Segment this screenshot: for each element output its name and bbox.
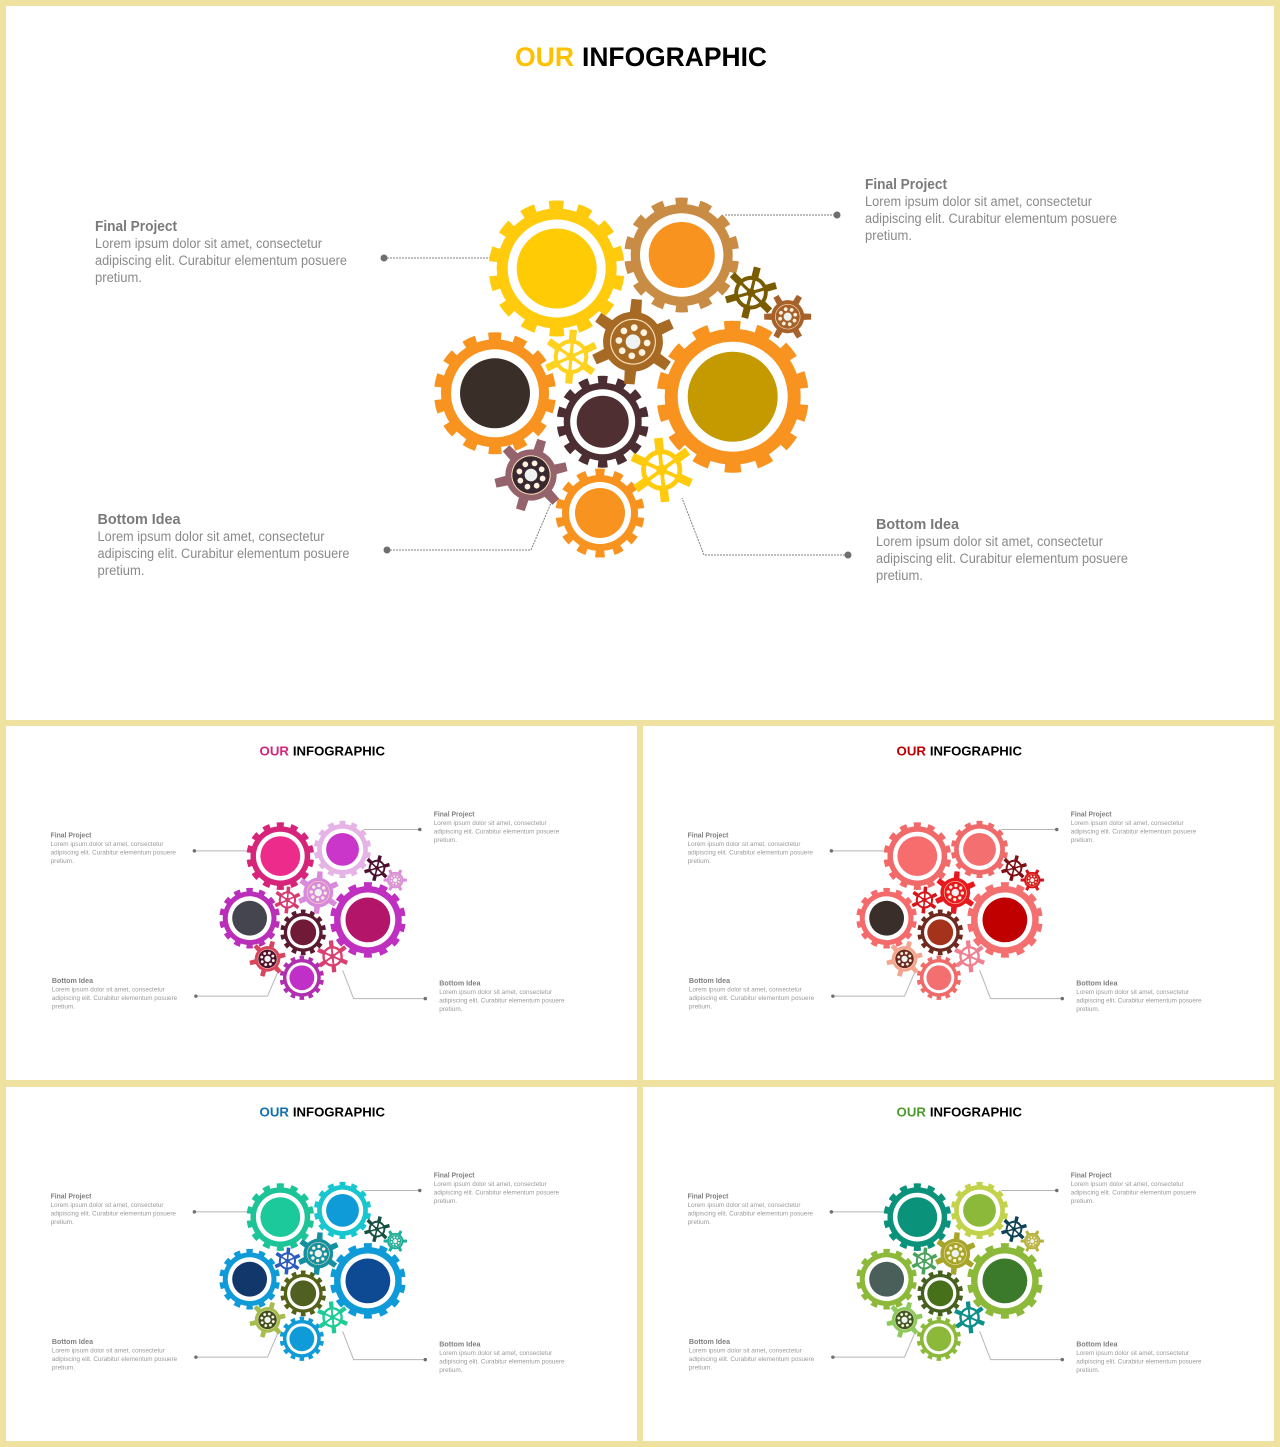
text block: bottom right: pretium. (1076, 1367, 1100, 1374)
text block: top left (51, 830, 176, 865)
text block: bottom left: pretium. (689, 1004, 712, 1011)
text block: bottom right: adipiscing elit. Curabitur elementum posuere (1076, 1359, 1202, 1366)
text block: top left: pretium. (95, 270, 142, 285)
leader: bottom right (682, 498, 852, 558)
leader: top left (830, 849, 884, 853)
text block: bottom left: Bottom Idea (52, 976, 94, 985)
gear: bearing teal (296, 1231, 340, 1276)
text block: bottom left: Lorem ipsum dolor sit amet, consectetur (52, 1348, 165, 1355)
text block: bottom right: Bottom Idea (439, 1340, 481, 1349)
text block: top right: pretium. (434, 837, 457, 844)
title: INFOGRAPHIC (582, 42, 767, 72)
text block: bottom left: adipiscing elit. Curabitur elementum posuere (52, 995, 177, 1002)
text block: bottom left: Lorem ipsum dolor sit amet, consectetur (98, 529, 325, 544)
gear: large purple and crimson (333, 885, 403, 955)
text block: top left: adipiscing elit. Curabitur elementum posuere (688, 849, 813, 856)
text block: top right: adipiscing elit. Curabitur elementum posuere (434, 828, 559, 835)
panel: green slide (643, 1087, 1274, 1441)
leader: bottom left (384, 503, 551, 554)
text block: bottom left: Lorem ipsum dolor sit amet, consectetur (689, 1348, 802, 1355)
gear: blue and navy (221, 1251, 278, 1307)
gear: dark centre (282, 911, 324, 953)
gear: bearing lime (246, 1297, 289, 1342)
text block: top left: adipiscing elit. Curabitur elementum posuere (51, 849, 176, 856)
text block: bottom right: Lorem ipsum dolor sit amet, consectetur (876, 534, 1103, 549)
leader: bottom left (194, 973, 277, 998)
text block: bottom left: adipiscing elit. Curabitur elementum posuere (52, 1356, 177, 1363)
text block: bottom right (1076, 979, 1202, 1013)
gear: orange and dark (438, 337, 552, 450)
text block: bottom left: Bottom Idea (689, 1337, 731, 1346)
gear: bearing light green (883, 1297, 926, 1342)
gear: bearing small (757, 285, 819, 348)
text block: bottom left: Bottom Idea (98, 512, 181, 528)
text block: bottom right: Lorem ipsum dolor sit amet, consectetur (1076, 1350, 1190, 1357)
text block: top right: Final Project (1071, 810, 1112, 819)
panel: blue slide (6, 1087, 637, 1441)
text block: bottom right: Bottom Idea (1076, 979, 1118, 988)
title: OUR (897, 743, 926, 758)
gear: bearing olive (933, 1231, 977, 1276)
text block: bottom left (689, 1337, 814, 1372)
gear: purple and slate (221, 890, 278, 946)
text block: top right (865, 177, 1117, 243)
text block: top left (95, 219, 347, 285)
gear: bearing small (1017, 1225, 1048, 1257)
text block: top right: adipiscing elit. Curabitur elementum posuere (1071, 828, 1196, 835)
text block: bottom right: pretium. (439, 1006, 463, 1013)
gear: blue bottom (282, 1319, 322, 1359)
gear: dark centre (919, 911, 961, 953)
gear: orange bottom (560, 472, 640, 554)
text block: top left (688, 830, 813, 865)
gear: bearing mauve (487, 430, 575, 520)
gear: wheel mint (316, 1300, 349, 1335)
text block: top left: pretium. (51, 1219, 74, 1226)
gear: dark centre (561, 380, 645, 464)
gear: wheel dark green (362, 1214, 392, 1245)
gear: wheel left (274, 886, 301, 914)
leader: top right (364, 828, 422, 831)
text block: bottom right: adipiscing elit. Curabitur elementum posuere (876, 551, 1128, 566)
text block: bottom left: Lorem ipsum dolor sit amet, consectetur (689, 987, 802, 994)
gear: wheel gold (629, 435, 695, 505)
text block: top left: pretium. (688, 1219, 711, 1226)
text block: top left: Final Project (688, 1191, 729, 1200)
text block: top right (434, 1171, 559, 1205)
panel: main yellow slide (6, 6, 1274, 720)
gear: purple bottom (282, 958, 322, 998)
text block: bottom right: Bottom Idea (439, 979, 481, 988)
text block: top left: Final Project (688, 830, 729, 839)
text block: top left: Lorem ipsum dolor sit amet, consectetur (51, 1202, 164, 1209)
leader: bottom right (343, 970, 427, 1000)
text block: bottom right: pretium. (439, 1367, 463, 1374)
leader: top left (830, 1210, 884, 1214)
leader: bottom right (343, 1331, 427, 1361)
text block: top right (434, 810, 559, 844)
leader: top right (1001, 1189, 1059, 1192)
gear: cyan (316, 1184, 369, 1237)
gear: wheel navy (999, 1214, 1029, 1245)
gear: large coral and red (970, 885, 1040, 955)
leader: top right (725, 212, 840, 218)
gear: bearing red (933, 870, 977, 915)
text block: bottom left: pretium. (52, 1004, 75, 1011)
text block: top right: Final Project (434, 1171, 475, 1180)
leader: top left (193, 1210, 247, 1214)
gear: wheel left (911, 886, 938, 914)
text block: bottom right (439, 1340, 565, 1374)
title: OUR (515, 42, 574, 72)
title: OUR (260, 1104, 289, 1119)
text block: top right: Lorem ipsum dolor sit amet, consectetur (434, 1181, 547, 1188)
text block: top left: Lorem ipsum dolor sit amet, consectetur (688, 1202, 801, 1209)
gear: lime (953, 1184, 1006, 1237)
leader: top right (1001, 828, 1059, 831)
text block: bottom right: Lorem ipsum dolor sit amet, consectetur (439, 1350, 553, 1357)
text block: bottom left: adipiscing elit. Curabitur elementum posuere (689, 1356, 814, 1363)
text block: top left: pretium. (688, 858, 711, 865)
gear: coral and dark (858, 890, 915, 946)
gear: bearing peach (883, 936, 926, 981)
gear: wheel rose (316, 939, 349, 974)
leader: bottom left (831, 973, 914, 998)
text block: top left: Final Project (51, 830, 92, 839)
gear: bearing small (380, 1225, 411, 1257)
text block: bottom right (1076, 1340, 1202, 1374)
text block: bottom left: Bottom Idea (689, 976, 731, 985)
gear: coral top left (886, 825, 949, 887)
text block: bottom left: adipiscing elit. Curabitur elementum posuere (98, 546, 350, 561)
gear: bearing small (1017, 864, 1048, 896)
gear: tan (629, 202, 735, 308)
text block: top right: pretium. (865, 228, 912, 243)
text block: top right: Lorem ipsum dolor sit amet, consectetur (434, 820, 547, 827)
gear: large green (970, 1246, 1040, 1316)
text block: bottom left: pretium. (52, 1365, 75, 1372)
gear: wheel dark (362, 853, 392, 884)
text block: bottom right: adipiscing elit. Curabitur elementum posuere (1076, 998, 1202, 1005)
leader: bottom left (831, 1334, 914, 1359)
text block: top right: adipiscing elit. Curabitur elementum posuere (434, 1189, 559, 1196)
text block: bottom left: adipiscing elit. Curabitur elementum posuere (689, 995, 814, 1002)
text block: bottom left: Bottom Idea (52, 1337, 94, 1346)
text block: top left: Final Project (51, 1191, 92, 1200)
text block: bottom right (876, 517, 1128, 583)
text block: top left: adipiscing elit. Curabitur elementum posuere (688, 1210, 813, 1217)
gear: dark green centre (919, 1272, 961, 1314)
text block: top left: Lorem ipsum dolor sit amet, consectetur (51, 841, 164, 848)
panel: red slide (643, 726, 1274, 1080)
text block: bottom right: pretium. (1076, 1006, 1100, 1013)
text block: top right: adipiscing elit. Curabitur elementum posuere (1071, 1189, 1196, 1196)
text block: bottom left (52, 1337, 177, 1372)
leader: top left (380, 254, 490, 262)
text block: top right: adipiscing elit. Curabitur elementum posuere (865, 211, 1117, 226)
text block: top right: Final Project (1071, 1171, 1112, 1180)
text block: top left (688, 1191, 813, 1226)
leader: top left (193, 849, 247, 853)
text block: bottom right: Bottom Idea (1076, 1340, 1118, 1349)
gear: green and slate (858, 1251, 915, 1307)
leader: top right (364, 1189, 422, 1192)
text block: top left: Final Project (95, 219, 177, 235)
gear: mint (249, 1186, 312, 1248)
title: INFOGRAPHIC (930, 743, 1022, 758)
text block: top right: Lorem ipsum dolor sit amet, consectetur (865, 194, 1092, 209)
gear: bearing lilac (296, 870, 340, 915)
text block: bottom right: adipiscing elit. Curabitur elementum posuere (439, 998, 565, 1005)
text block: top right: Lorem ipsum dolor sit amet, consectetur (1071, 820, 1184, 827)
text block: bottom left (689, 976, 814, 1011)
text block: bottom right: adipiscing elit. Curabitur elementum posuere (439, 1359, 565, 1366)
text block: bottom left (98, 512, 350, 578)
gear: wheel left (911, 1247, 938, 1275)
text block: top left: adipiscing elit. Curabitur elementum posuere (51, 1210, 176, 1217)
gear: green bottom (919, 1319, 959, 1359)
text block: top right (1071, 1171, 1196, 1205)
text block: bottom left: pretium. (98, 563, 144, 578)
title: INFOGRAPHIC (930, 1104, 1022, 1119)
text block: bottom right: pretium. (876, 568, 923, 583)
gear: yellow (494, 206, 620, 332)
text block: top right: Final Project (865, 177, 947, 193)
gear: teal (886, 1186, 949, 1248)
gear: bearing brown (589, 296, 677, 388)
gear: wheel olive (721, 261, 781, 324)
gear: lilac (316, 823, 369, 876)
text block: top left: Lorem ipsum dolor sit amet, consectetur (95, 236, 322, 251)
text block: bottom right (439, 979, 565, 1013)
text block: top left: pretium. (51, 858, 74, 865)
gear: olive centre (282, 1272, 324, 1314)
gear: wheel pink (953, 939, 986, 974)
title: INFOGRAPHIC (293, 743, 385, 758)
text block: top right: pretium. (1071, 837, 1094, 844)
gear: wheel left (274, 1247, 301, 1275)
gear: wheel teal (953, 1300, 986, 1335)
title: INFOGRAPHIC (293, 1104, 385, 1119)
text block: bottom left (52, 976, 177, 1011)
leader: bottom right (980, 970, 1064, 1000)
panel: pink slide (6, 726, 637, 1080)
text block: bottom right: Bottom Idea (876, 517, 960, 533)
text block: top left: Lorem ipsum dolor sit amet, consectetur (688, 841, 801, 848)
gear: bearing rose (246, 936, 289, 981)
text block: top left: adipiscing elit. Curabitur elementum posuere (95, 253, 347, 268)
gear: large blue (333, 1246, 403, 1316)
text block: bottom right: Lorem ipsum dolor sit amet, consectetur (1076, 989, 1190, 996)
text block: top right: pretium. (434, 1198, 457, 1205)
gear: coral top right (953, 823, 1006, 876)
gear: magenta (249, 825, 312, 887)
leader: bottom left (194, 1334, 277, 1359)
text block: bottom left: Lorem ipsum dolor sit amet, consectetur (52, 987, 165, 994)
gear: coral bottom (919, 958, 959, 998)
gear: wheel left (544, 328, 598, 386)
text block: bottom left: pretium. (689, 1365, 712, 1372)
text block: bottom right: Lorem ipsum dolor sit amet, consectetur (439, 989, 553, 996)
text block: top right: Final Project (434, 810, 475, 819)
text block: top left (51, 1191, 176, 1226)
leader: bottom right (980, 1331, 1064, 1361)
text block: top right (1071, 810, 1196, 844)
text block: top right: Lorem ipsum dolor sit amet, consectetur (1071, 1181, 1184, 1188)
text block: top right: pretium. (1071, 1198, 1094, 1205)
gear: bearing small (380, 864, 411, 896)
gear: wheel dark red (999, 853, 1029, 884)
gear: large orange and olive (662, 326, 804, 468)
title: OUR (897, 1104, 926, 1119)
title: OUR (260, 743, 289, 758)
